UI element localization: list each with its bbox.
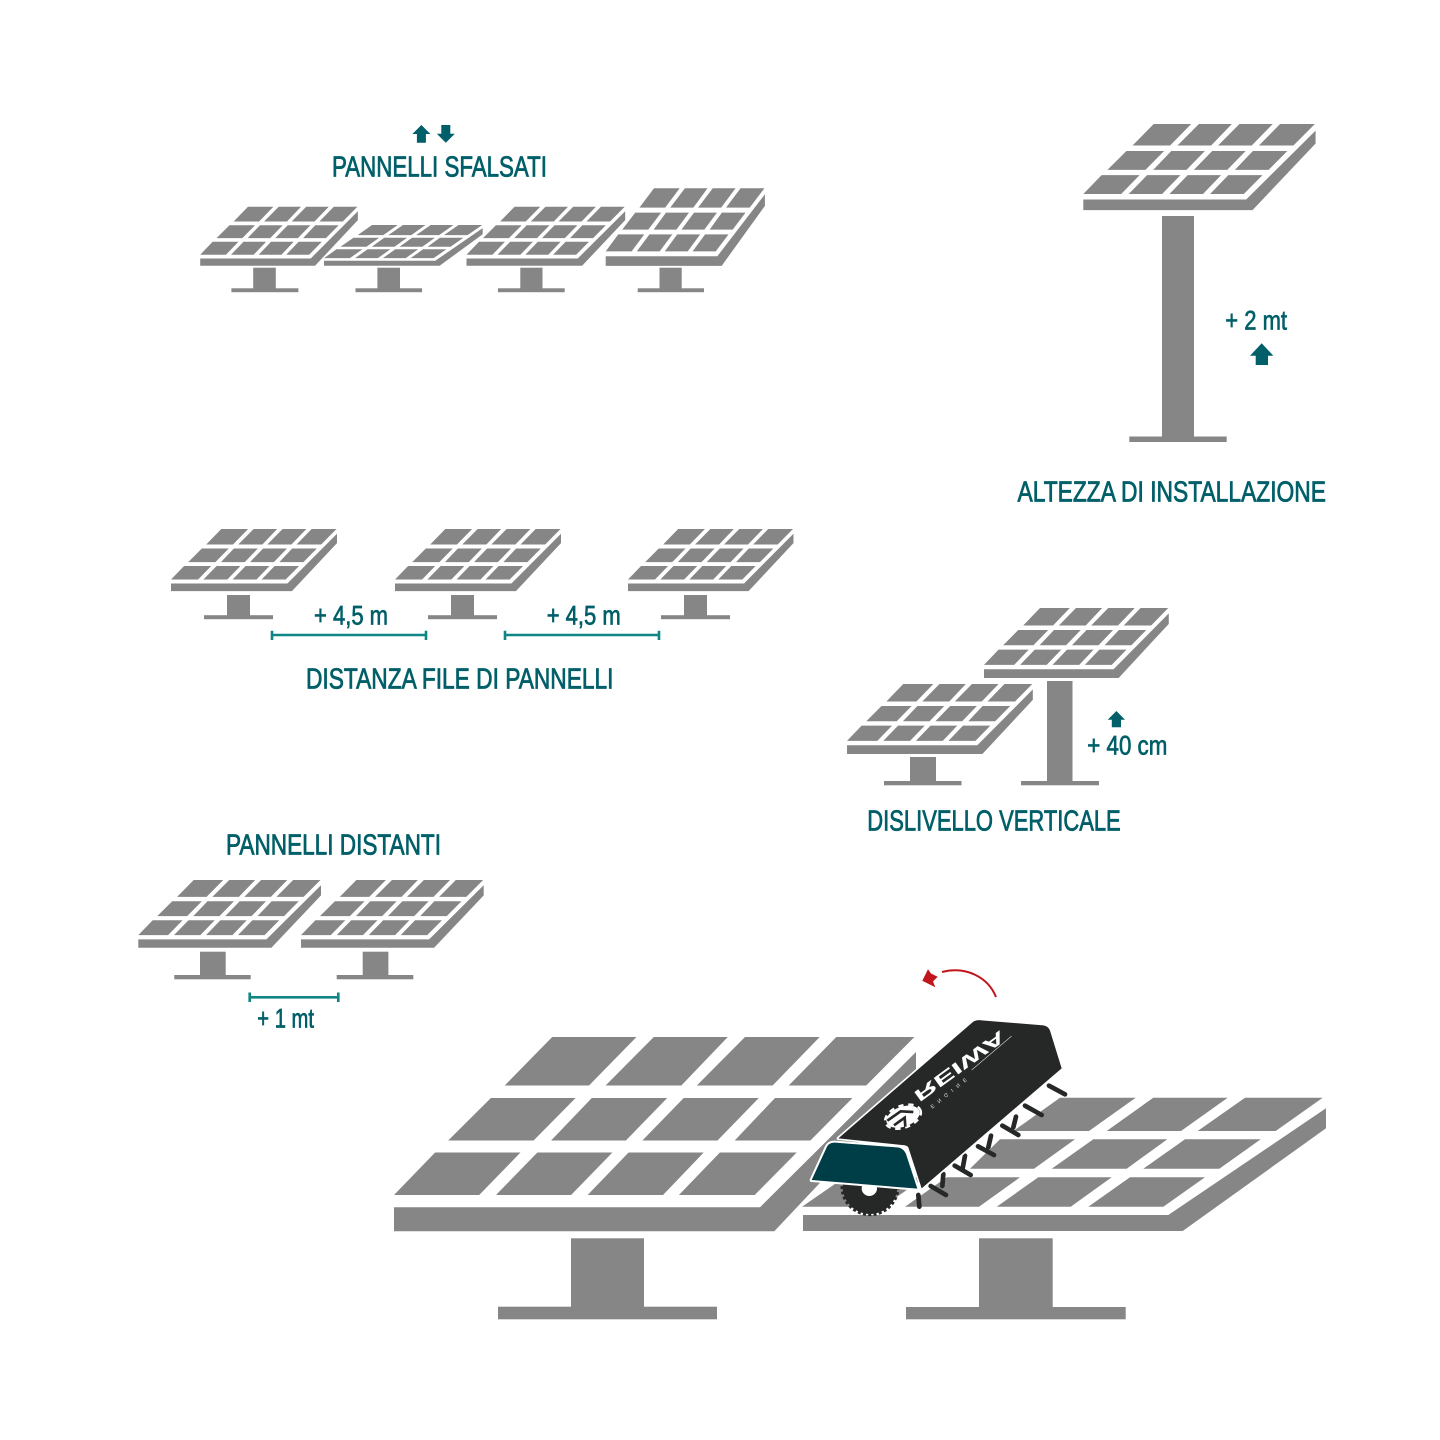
section: pannelli sfalsati [200, 125, 765, 292]
value: +2 mt: + 2 mt [1225, 305, 1287, 335]
section: pannelli distanti [138, 829, 484, 1034]
value: +4,5 m left: + 4,5 m [314, 601, 388, 631]
value: +4,5 m right: + 4,5 m [547, 601, 621, 631]
icon: down arrow [437, 125, 455, 143]
robot legs [918, 1086, 1065, 1207]
measure line left [272, 631, 426, 640]
large solar panel right [802, 1098, 1326, 1319]
lower solar panel [847, 684, 1033, 785]
heading: altezza di installazione: ALTEZZA DI INSTALLAZIONE [1018, 477, 1326, 509]
robot logo wordmark: REIWA [910, 1026, 1009, 1105]
robot teal front [812, 1143, 917, 1189]
section: altezza di installazione [1018, 124, 1326, 509]
heading: pannelli distanti: PANNELLI DISTANTI [226, 829, 441, 861]
icon: up arrow [1250, 343, 1273, 365]
large solar panel left [394, 1037, 916, 1319]
robot brush wheel [842, 1159, 898, 1215]
heading: distanza file di pannelli: DISTANZA FILE DI PANNELLI [306, 663, 614, 695]
measure line [250, 992, 338, 1002]
solar panel 2 [324, 225, 483, 292]
heading: pannelli sfalsati: PANNELLI SFALSATI [332, 152, 547, 184]
solar panel right [301, 880, 484, 979]
solar panel left [138, 880, 321, 979]
value: +1 mt: + 1 mt [257, 1004, 314, 1034]
solar panel row 2 [395, 529, 561, 619]
solar panel row 3 [628, 529, 793, 619]
solar panel row 1 [171, 529, 337, 619]
solar panel 1 [200, 207, 358, 292]
robot logo tagline: E N G I N E [929, 1076, 968, 1109]
robot logo gear [882, 1100, 924, 1133]
robot logo line [972, 1036, 1012, 1070]
cleaning robot [812, 1020, 1065, 1215]
raised solar panel [984, 608, 1169, 785]
icon: up arrow [1108, 711, 1125, 727]
tall solar panel [1083, 124, 1316, 442]
solar panel 4 [606, 188, 765, 292]
section: distanza file di pannelli [171, 529, 793, 695]
section: dislivello verticale [847, 608, 1169, 838]
solar panel 3 [466, 207, 625, 292]
curved red arrow [922, 969, 996, 997]
heading: dislivello verticale: DISLIVELLO VERTICALE [867, 806, 1121, 838]
value: +40 cm: + 40 cm [1087, 730, 1167, 760]
icon: up arrow [412, 125, 430, 143]
measure line right [505, 631, 659, 640]
robot body [838, 1020, 1062, 1188]
